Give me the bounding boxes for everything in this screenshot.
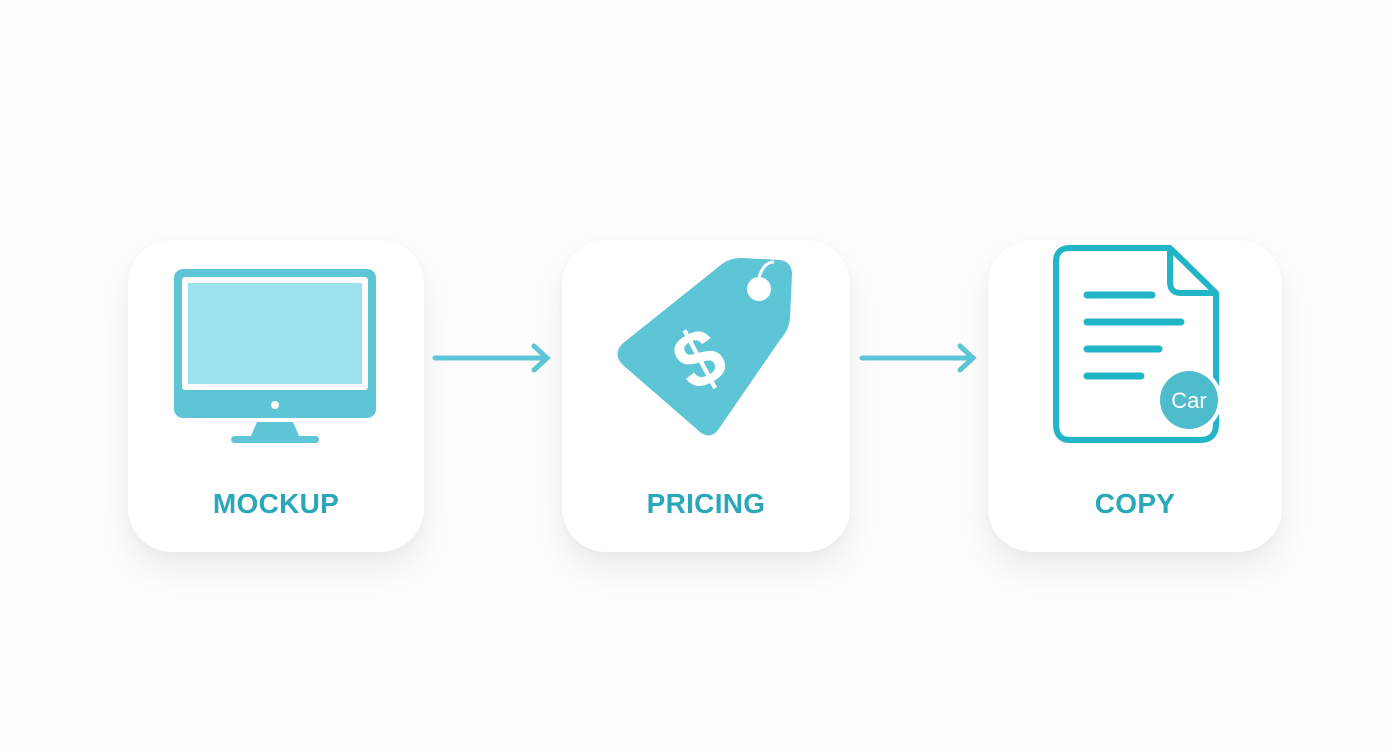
arrow 2: [862, 346, 973, 370]
icon: monitor: [174, 269, 376, 443]
label: copy: COPY: [1095, 488, 1175, 519]
icon: document: [1056, 248, 1222, 440]
card: mockup: [128, 240, 424, 552]
label: mockup: MOCKUP: [213, 488, 339, 519]
icon: price tag: [617, 258, 792, 436]
card: pricing: [562, 240, 850, 552]
card: copy: [988, 240, 1282, 552]
icon: document: Car: [1171, 388, 1207, 413]
arrow 1: [435, 346, 547, 370]
label: pricing: PRICING: [647, 488, 765, 519]
icon: price tag: $: [659, 309, 740, 408]
